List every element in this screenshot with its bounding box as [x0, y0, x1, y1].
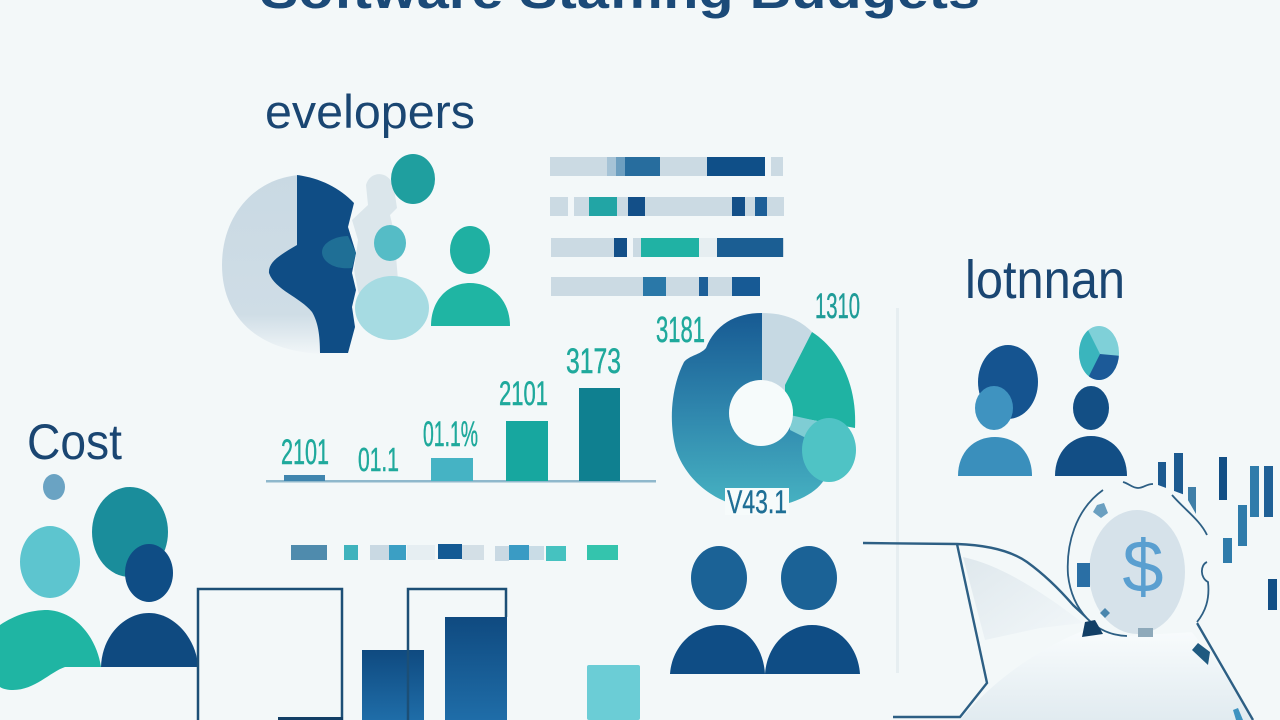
heading: cost: Cost: [27, 414, 122, 470]
row 3: [551, 238, 784, 257]
frame left: [198, 589, 342, 720]
row 2: [550, 197, 784, 216]
bar tall: [445, 617, 507, 720]
legend strip: [291, 544, 618, 561]
icon: pale teal head: [20, 526, 80, 598]
bar mid: [362, 650, 424, 720]
label backing and text: bottom: V43.1: [727, 484, 787, 520]
icon: person right: [765, 546, 860, 674]
bar 5: [579, 388, 620, 481]
bar 4: [506, 421, 548, 481]
bar light teal: [587, 665, 640, 720]
donut hole: [729, 380, 793, 446]
chart: right mini bars: [1158, 453, 1277, 610]
heading: developers: evelopers: [265, 85, 475, 138]
chart: bar chart: [266, 342, 656, 482]
icon: dark body: [101, 613, 198, 667]
slot details: [1082, 620, 1243, 720]
bar short dark: [278, 717, 343, 720]
panel: bottom pair of people: [670, 546, 860, 674]
segment: pale teal wedge: [790, 415, 835, 445]
icon: large pale head: [222, 175, 335, 354]
icon: person right: [1055, 386, 1127, 476]
icon: small teal head: [374, 225, 406, 261]
icon: pale grey figure: [352, 174, 398, 300]
segment: pale grey: [762, 313, 812, 395]
icon: teal body: [0, 610, 101, 690]
label 5: 3173: [566, 342, 621, 381]
coin: [1068, 482, 1208, 636]
icon: large teal head: [92, 487, 168, 577]
heading: right panel: lotnnan: [965, 250, 1125, 310]
panel: developers figures: [222, 154, 510, 354]
pig ear fill: [963, 557, 1083, 640]
label 2: 01.1: [358, 441, 399, 478]
coin face: [1089, 510, 1185, 634]
panel: right figures: [958, 322, 1127, 476]
label 4: 2101: [499, 375, 548, 413]
icon: piggy bank with coin: [863, 482, 1253, 720]
bar 1: [284, 475, 325, 481]
label: top left: 3181: [656, 309, 705, 350]
icon: teal head top: [391, 154, 435, 204]
icon: dark head profile: [269, 175, 356, 353]
label 1: 2101: [281, 433, 329, 472]
icon: person left: [670, 546, 765, 674]
icon: mini pie: [1079, 326, 1119, 380]
icon: small dot: [43, 474, 65, 500]
icon: pale teal body: [355, 276, 429, 340]
coin notches: [1077, 503, 1110, 618]
segment: light teal circle: [802, 418, 856, 482]
label: top right: 1310: [815, 287, 860, 326]
row 4: [551, 277, 760, 296]
segment: main blue-teal: [672, 313, 838, 508]
coin outline: [1068, 482, 1208, 636]
label 3: 01.1%: [423, 415, 478, 454]
chart: donut: [656, 287, 860, 520]
segment: green: [785, 332, 855, 428]
chart: stacked row bars: [550, 157, 784, 296]
row 1: [550, 157, 783, 176]
coin outer disc: [1068, 482, 1207, 636]
icon: face highlight: [322, 236, 356, 268]
icon: person left: [958, 345, 1038, 476]
vertical divider: [896, 308, 899, 673]
pig body: [960, 627, 1253, 720]
dollar sign: $: [1122, 525, 1164, 608]
bar 3: [431, 458, 473, 481]
chart: framed bars: [198, 589, 640, 720]
pig outline: [863, 543, 1253, 720]
icon: dark head: [125, 544, 173, 602]
frame right: [408, 589, 506, 720]
panel: cost figures: [0, 474, 198, 690]
axis: [266, 480, 656, 482]
icon: green person: [431, 226, 510, 326]
